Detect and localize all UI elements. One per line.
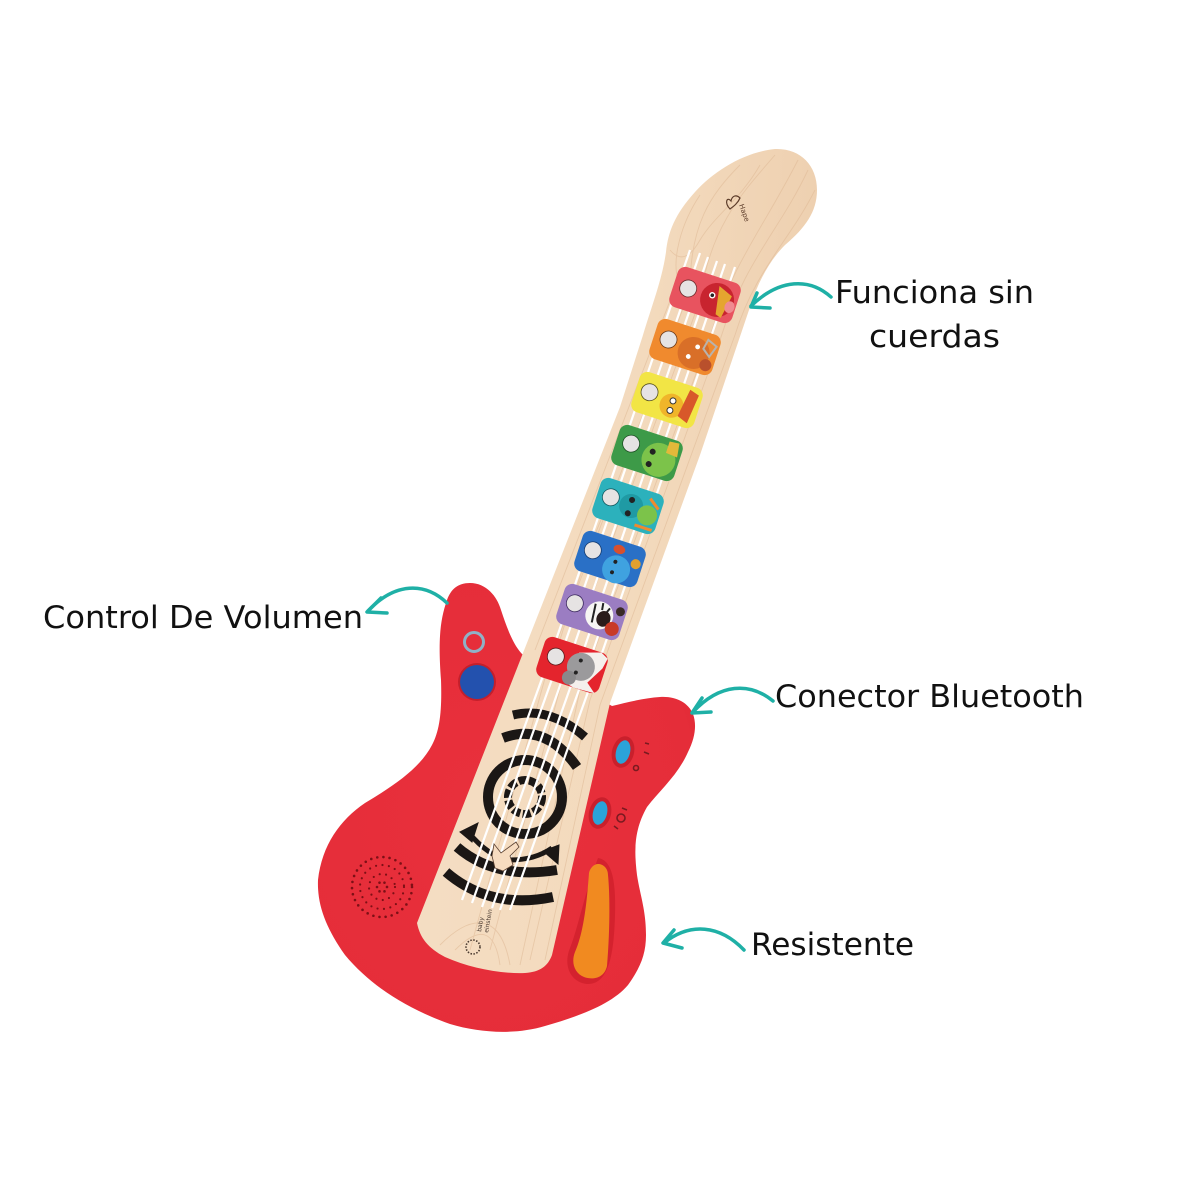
arrow <box>692 688 773 713</box>
tile: orange tiger <box>647 317 723 377</box>
volume knob <box>458 663 496 701</box>
arrow <box>751 284 831 308</box>
label: Conector Bluetooth <box>775 679 1084 715</box>
callout: Funciona sin cuerdas <box>751 275 1044 355</box>
icon: pointing hand <box>492 842 519 871</box>
label: Resistente <box>751 927 914 963</box>
mode slider bottom <box>585 795 615 831</box>
note tiles <box>534 265 743 695</box>
tile: purple zebra <box>554 582 630 642</box>
brand: baby einstein: baby <box>476 916 486 932</box>
tile: yellow lion <box>629 370 705 430</box>
callout: Control De Volumen <box>43 588 447 636</box>
tile: green frog <box>609 423 685 483</box>
tile: blue bunny <box>572 529 648 590</box>
brand: Hape <box>727 196 751 223</box>
guitar illustration <box>318 149 817 1032</box>
brand: baby einstein: einstein <box>483 908 494 933</box>
infographic canvas <box>44 149 1082 1032</box>
callout: Conector Bluetooth <box>692 679 1084 715</box>
mode slider top <box>608 734 638 770</box>
volume ring <box>464 632 484 652</box>
brand: baby einstein <box>466 908 494 954</box>
black touch pattern <box>446 713 585 900</box>
guitar red body <box>318 583 695 1032</box>
tile: red elephant <box>534 635 610 695</box>
speaker holes <box>352 857 412 917</box>
wooden neck and pickguard <box>417 149 817 973</box>
arrow <box>367 588 447 613</box>
strings <box>462 250 735 910</box>
label: cuerdas <box>869 319 1000 355</box>
label: Control De Volumen <box>43 600 363 636</box>
brand: Hape: Hape <box>737 203 751 223</box>
slider icons <box>614 743 649 829</box>
tile: teal turtle <box>590 476 666 536</box>
label: Funciona sin <box>835 275 1034 311</box>
tile: red giraffe <box>667 265 743 325</box>
arrow <box>663 929 744 950</box>
orange strum lever <box>567 858 615 984</box>
callout: Resistente <box>663 927 914 963</box>
